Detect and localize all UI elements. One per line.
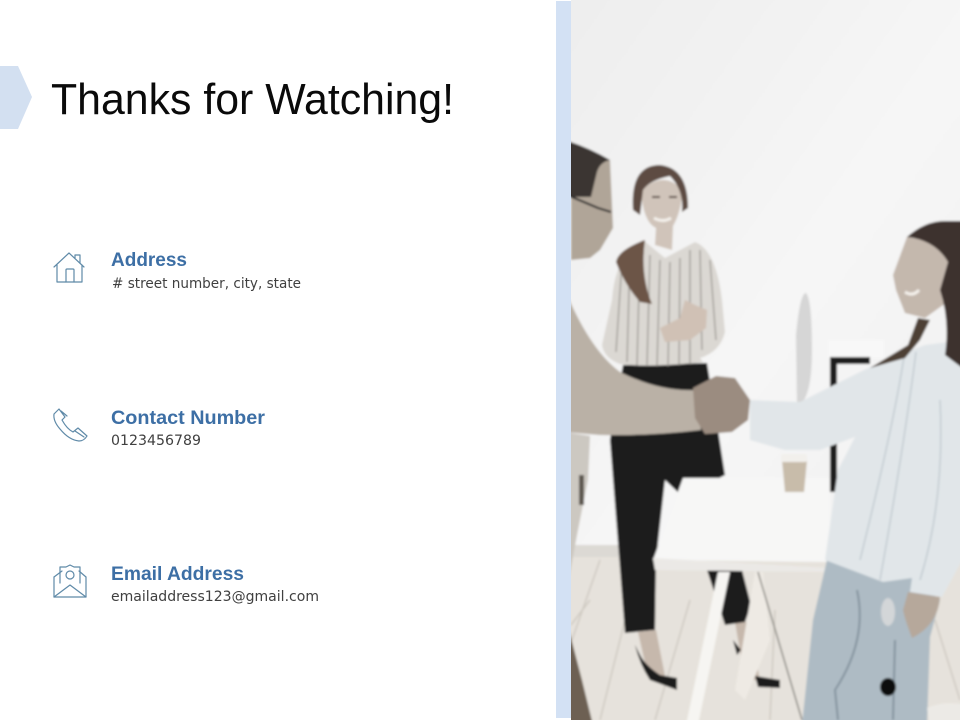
photo wall background: [565, 0, 960, 560]
photo: white shoe corner: [927, 703, 960, 720]
title accent chevron: [0, 66, 32, 129]
contact item: email: [54, 564, 319, 605]
photo: centre woman ponytail: [616, 240, 652, 304]
photo: centre woman head: [633, 165, 688, 250]
heading: address: Address: [111, 250, 187, 271]
photo floor with boards: [565, 545, 960, 720]
photo: back monitor: [828, 356, 872, 494]
photo: handshake: [693, 376, 750, 434]
photo: right woman head and hair: [870, 221, 960, 370]
heading: email address: Email Address: [111, 564, 244, 585]
title: Thanks for Watching!: [51, 75, 454, 124]
photo: right woman jeans: [802, 560, 940, 720]
photo: side-on monitor: [796, 293, 812, 407]
contact item: address: [54, 250, 301, 292]
photo: coffee cup: [781, 454, 807, 492]
photo: man sweater arm and torso: [565, 290, 701, 720]
icon: open envelope: [54, 565, 86, 597]
text: phone number: 0123456789: [111, 433, 201, 449]
contact item: phone: [54, 408, 266, 449]
photo: centre woman legs and trousers: [610, 363, 780, 690]
icon: house: [54, 253, 84, 282]
photo: right woman shirt: [750, 340, 960, 597]
icon: telephone handset: [54, 409, 87, 441]
blue band beside photo: [556, 1, 571, 718]
photo: centre woman hands: [660, 300, 707, 342]
photo: office handshake scene: [565, 0, 960, 720]
text: street address: # street number, city, state: [112, 276, 301, 292]
photo: man head: [571, 140, 614, 261]
photo: centre woman blouse: [602, 240, 725, 366]
photo: table: [653, 478, 830, 720]
text: email: emailaddress123@gmail.com: [111, 589, 319, 605]
photo: right woman hand: [903, 592, 940, 638]
heading: contact number: Contact Number: [111, 408, 266, 429]
